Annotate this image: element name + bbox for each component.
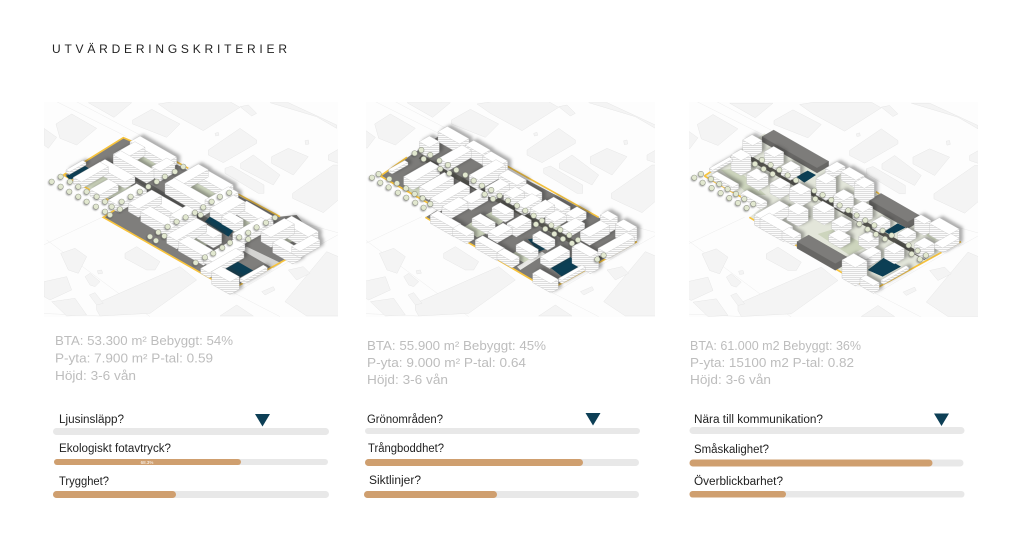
criteria scale: Nära till kommunikation (690, 414, 964, 434)
trees 3 (692, 157, 929, 262)
panel: alternative 3 site model (681, 100, 988, 320)
criteria scale: Grönområden: Grönområden? (367, 414, 443, 426)
central street 2 (419, 155, 604, 260)
stats text 3: P-yta: 15100 m2 P-tal: 0.82 (690, 355, 854, 370)
criteria bar: Trygghet: Trygghet? (59, 476, 109, 488)
parking and roof accents 3 (796, 171, 906, 277)
parking and roof accents 2 (528, 238, 583, 277)
criteria bar: Trångboddhet: Trångboddhet? (368, 443, 444, 455)
panel: alternative 2 site model (359, 100, 665, 320)
criteria bar: Överblickbarhet (690, 476, 964, 498)
flat grey buildings 3 (762, 130, 919, 229)
site ground 3 (704, 133, 961, 291)
criteria bar: Ekologiskt fotavtryck: Ekologiskt fotavtryck? (59, 443, 171, 455)
green courtyards 2 (405, 174, 562, 263)
stats text 2 (367, 338, 546, 387)
trees 1 (49, 164, 278, 265)
criteria bar: Siktlinjer: Siktlinjer? (369, 475, 421, 487)
central street 3 (748, 156, 928, 260)
stats text 3 (690, 338, 861, 387)
buildings 3 (709, 135, 959, 268)
stats text 2: P-yta: 9.000 m² P-tal: 0.64 (367, 355, 526, 370)
light walkway 2 (517, 252, 545, 270)
front buildings 3 (842, 253, 909, 293)
stats text 2: BTA: 55.900 m² Bebyggt: 45% (367, 338, 546, 353)
stats text 1: P-yta: 7.900 m² P-tal: 0.59 (55, 350, 213, 366)
stats text 1 (55, 333, 233, 383)
criteria bar: Trygghet (53, 476, 329, 498)
criteria bar: Ekologiskt fotavtryck (54, 443, 328, 465)
criteria bar: Småskalighet: Småskalighet? (694, 444, 769, 456)
green courtyards 1 (86, 156, 292, 246)
criteria bar: Trångboddhet (365, 443, 639, 466)
yellow site boundary 1 (62, 136, 286, 286)
flat grey building front 3 (797, 235, 847, 270)
yellow site boundary 2 (380, 157, 637, 290)
buildings 2 (389, 126, 637, 293)
yellow site boundary 3 (704, 171, 962, 288)
parking and roof accents 1 (66, 166, 253, 283)
title: UTVÄRDERINGSKRITERIER (52, 42, 287, 56)
criteria scale: Ljusinsläpp: Ljusinsläpp? (59, 414, 124, 426)
trees 2 (369, 147, 606, 262)
criteria bar: Överblickbarhet: Överblickbarhet? (694, 476, 783, 488)
stats text 3: Höjd: 3-6 vån (690, 372, 771, 387)
panel: alternative 1 site model (40, 100, 347, 320)
criteria scale: Nära till kommunikation: Nära till kommunikation? (694, 414, 823, 426)
criteria bar: Siktlinjer (364, 475, 639, 498)
site ground 2 (380, 135, 637, 290)
criteria scale: Grönområden (365, 413, 640, 434)
buildings 1 (66, 136, 320, 295)
stats text 3: BTA: 61.000 m2 Bebyggt: 36% (690, 338, 861, 353)
criteria scale: Ljusinsläpp (53, 414, 329, 435)
stats text 1: Höjd: 3-6 vån (55, 368, 136, 383)
stats text 2: Höjd: 3-6 vån (367, 372, 448, 387)
stats text 1: BTA: 53.300 m² Bebyggt: 54% (55, 333, 233, 348)
green courtyards 3 (721, 168, 943, 255)
criteria bar: Småskalighet (690, 444, 964, 466)
criteria bar: Ekologiskt fotavtryck: 68.3% (141, 460, 153, 465)
site ground 1 (65, 138, 302, 284)
